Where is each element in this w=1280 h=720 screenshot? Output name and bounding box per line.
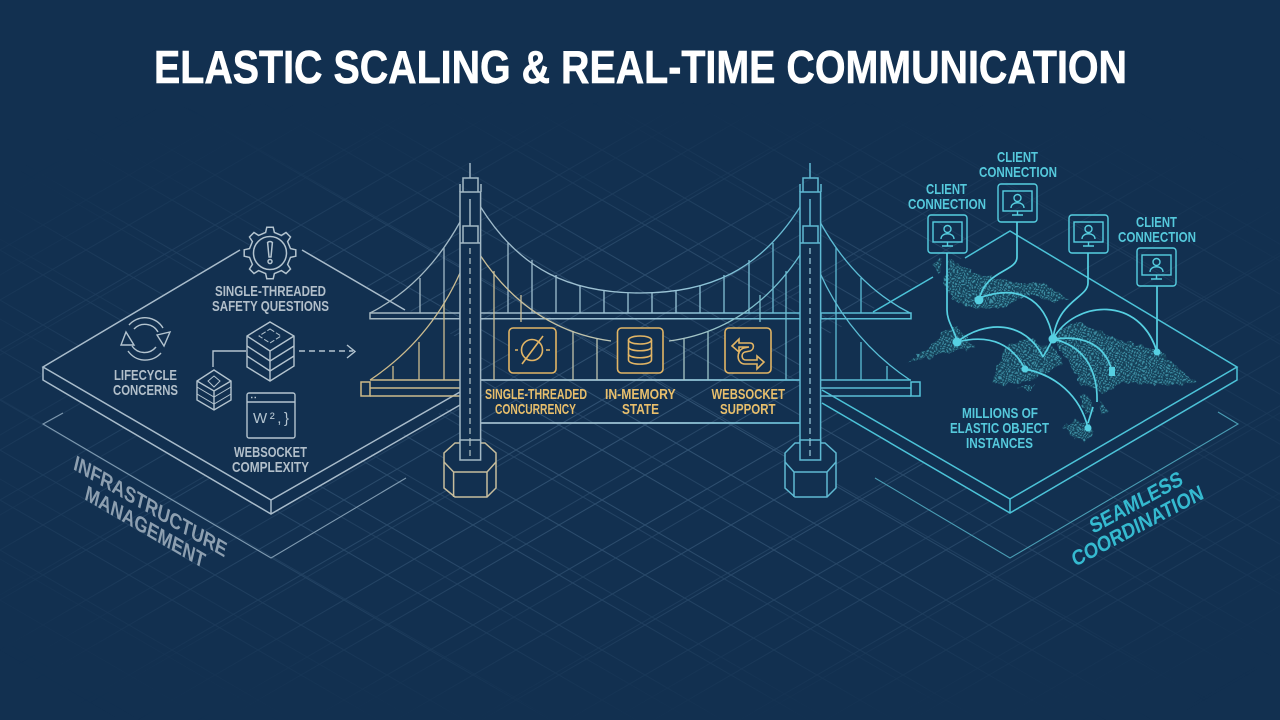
lower deck ends (361, 380, 920, 396)
icon: websocket code window (247, 393, 295, 438)
text: lifecycle concerns: LIFECYCLE (114, 367, 177, 384)
icon: in-memory database (618, 328, 663, 373)
icon: client monitor C (1069, 215, 1108, 253)
text: websocket complexity (232, 444, 309, 476)
label: infrastructure management: MANAGEMENT (83, 482, 208, 573)
text: millions of elastic object instances: INSTANCES (966, 435, 1033, 452)
chart: connection arcs and nodes (947, 222, 1160, 432)
panel: bridge capabilities (485, 328, 785, 418)
icon: lifecycle arrows (121, 318, 170, 360)
icon: websocket code window: W²,} (253, 410, 289, 427)
text: client connection top (979, 149, 1057, 181)
chart: dotted world map (907, 258, 1197, 442)
text: websocket support: WEBSOCKET (712, 386, 785, 403)
lower suspension cables (370, 255, 910, 380)
text: client connection right: CLIENT (1136, 214, 1177, 231)
icon: websocket arrows (725, 328, 771, 373)
text: single-threaded concurrency: SINGLE-THREADED (485, 386, 587, 403)
label: infrastructure management: INFRASTRUCTURE (72, 452, 229, 563)
text: lifecycle concerns (113, 367, 178, 399)
text: millions of elastic object instances: ELASTIC OBJECT (950, 420, 1049, 437)
label: seamless coordination: COORDINATION (1069, 481, 1207, 572)
icon: client monitor A (928, 215, 967, 253)
text: in-memory state (605, 386, 676, 418)
title: ELASTIC SCALING & REAL-TIME COMMUNICATION (154, 41, 1127, 93)
icon: single-threaded concurrency (509, 328, 556, 373)
text: in-memory state: IN-MEMORY (605, 386, 676, 403)
text: lifecycle concerns: CONCERNS (113, 382, 178, 399)
text: single-threaded concurrency: CONCURRENCY (495, 401, 576, 418)
text: single-threaded concurrency (485, 386, 587, 418)
text: millions of elastic object instances (950, 405, 1049, 452)
icon: server stacks with dashed arrow (197, 322, 355, 410)
panel: seamless coordination platform (810, 149, 1238, 572)
text: single-threaded safety questions (212, 283, 329, 315)
text: single-threaded safety questions: SINGLE-THREADED (215, 283, 326, 300)
text: in-memory state: STATE (622, 401, 659, 418)
text: websocket complexity: WEBSOCKET (234, 444, 307, 461)
upper deck (370, 313, 911, 423)
left tower (444, 163, 496, 497)
text: single-threaded safety questions: SAFETY QUESTIONS (212, 298, 329, 315)
text: client connection left: CONNECTION (908, 196, 986, 213)
icon: client monitor D (1137, 248, 1176, 286)
text: client connection top: CONNECTION (979, 164, 1057, 181)
text: client connection right (1118, 214, 1196, 246)
text: millions of elastic object instances: MILLIONS OF (962, 405, 1038, 422)
text: websocket support: SUPPORT (720, 401, 776, 418)
text: websocket support (712, 386, 785, 418)
text: client connection left (908, 181, 986, 213)
text: websocket complexity: COMPLEXITY (232, 459, 309, 476)
text: client connection top: CLIENT (997, 149, 1038, 166)
label: seamless coordination: SEAMLESS (1087, 467, 1186, 539)
right tower (785, 163, 836, 497)
icon: client monitor B (998, 184, 1037, 222)
panel: infrastructure management platform (43, 227, 470, 573)
upper suspension cables (370, 207, 910, 313)
icon: warning gear (244, 227, 296, 279)
text: client connection right: CONNECTION (1118, 229, 1196, 246)
bridge structure (361, 163, 920, 497)
text: client connection left: CLIENT (926, 181, 967, 198)
